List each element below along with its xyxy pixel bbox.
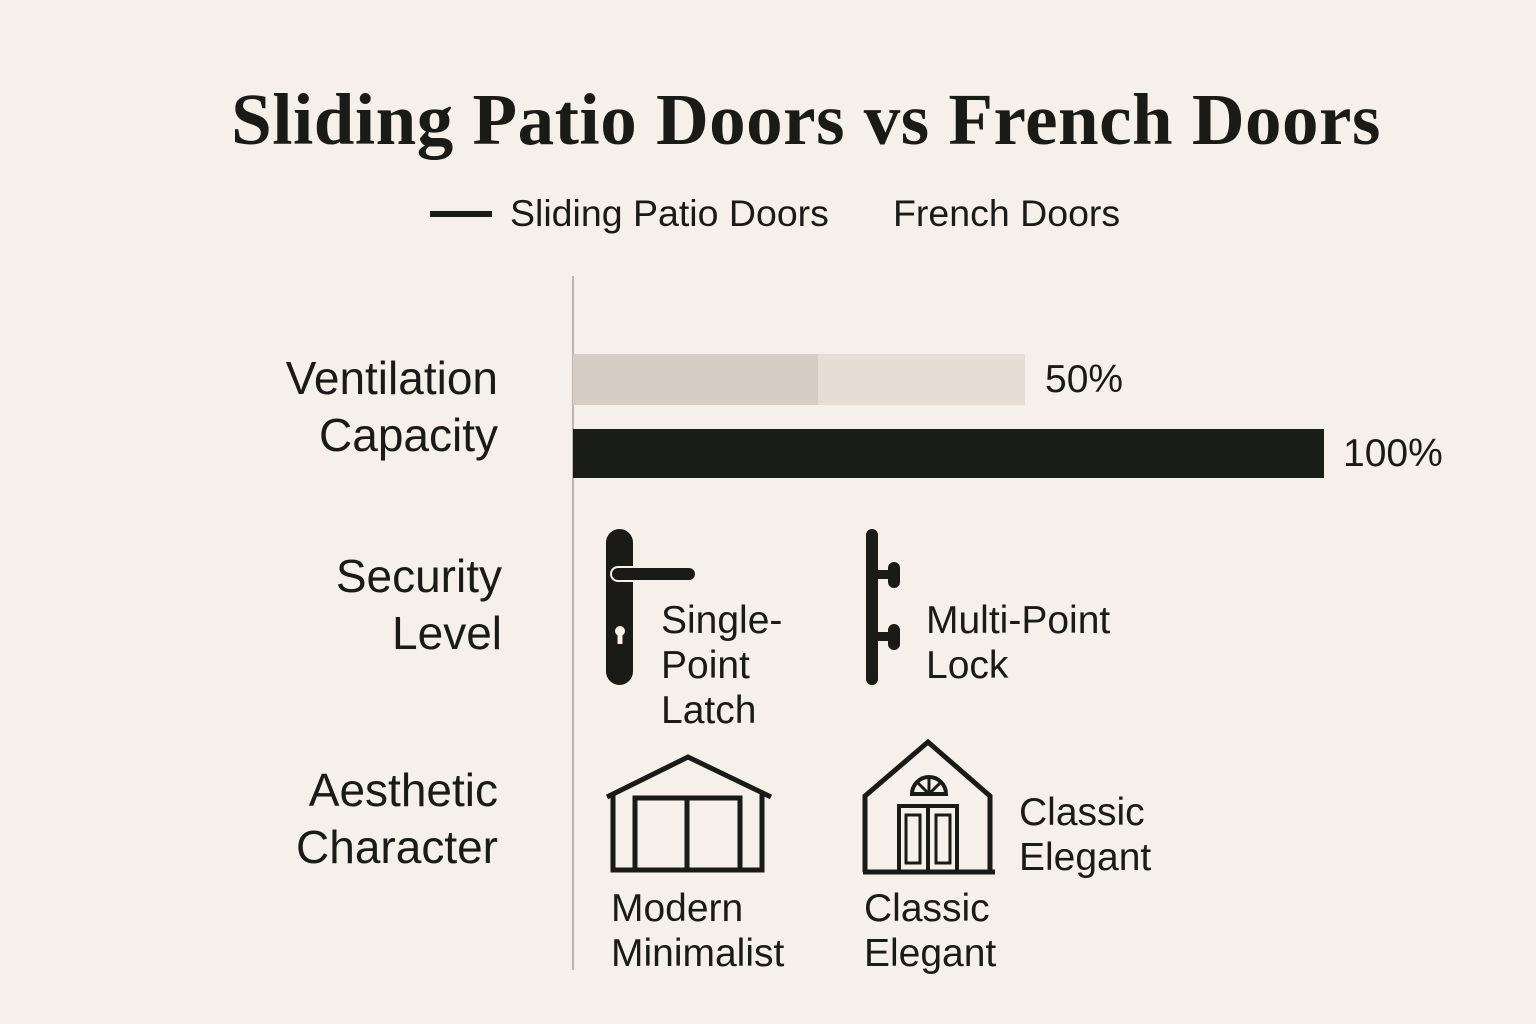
text: single point latch: Point <box>661 644 750 687</box>
text: modern minimalist <box>611 887 784 975</box>
text: multi point lock: Multi-Point <box>926 599 1110 642</box>
icon: door handle <box>606 529 695 685</box>
label: ventilation <box>286 352 498 461</box>
label: ventilation: Ventilation <box>286 352 498 404</box>
text: single point latch: Latch <box>661 689 756 732</box>
text: classic elegant under: Classic <box>864 887 990 930</box>
text: single point latch: Single- <box>661 599 782 642</box>
icon: classic house <box>862 738 995 874</box>
label: aesthetic: Aesthetic <box>309 764 498 816</box>
bar: sliding 100% <box>573 429 1324 478</box>
text: classic elegant right: Classic <box>1019 791 1145 834</box>
icon: multipoint lock <box>866 529 900 685</box>
bar: french 50% <box>573 354 1025 405</box>
text: modern minimalist: Modern <box>611 887 743 930</box>
text: multi point lock: Lock <box>926 644 1008 687</box>
legend: Sliding Patio Doors <box>510 192 829 234</box>
text: single point latch <box>661 599 782 732</box>
text: classic elegant under <box>864 887 996 975</box>
value 100%: 100% <box>1343 432 1443 475</box>
text: multi point lock <box>926 599 1110 687</box>
label: security <box>336 550 502 659</box>
label: aesthetic: Character <box>296 821 498 873</box>
axis line <box>572 276 574 970</box>
text: classic elegant right <box>1019 791 1151 879</box>
bar chart: ventilation <box>573 354 1443 478</box>
text: modern minimalist: Minimalist <box>611 932 784 975</box>
label: security: Level <box>392 607 502 659</box>
value 50%: 50% <box>1045 358 1123 401</box>
label: security: Security <box>336 550 502 602</box>
title: Sliding Patio Doors vs French Doors <box>231 79 1381 160</box>
legend: French Doors <box>893 192 1120 234</box>
label: aesthetic <box>296 764 498 873</box>
legend <box>430 192 1120 234</box>
label: ventilation: Capacity <box>319 409 498 461</box>
text: classic elegant under: Elegant <box>864 932 996 975</box>
icon: modern house <box>606 754 772 872</box>
text: classic elegant right: Elegant <box>1019 836 1151 879</box>
